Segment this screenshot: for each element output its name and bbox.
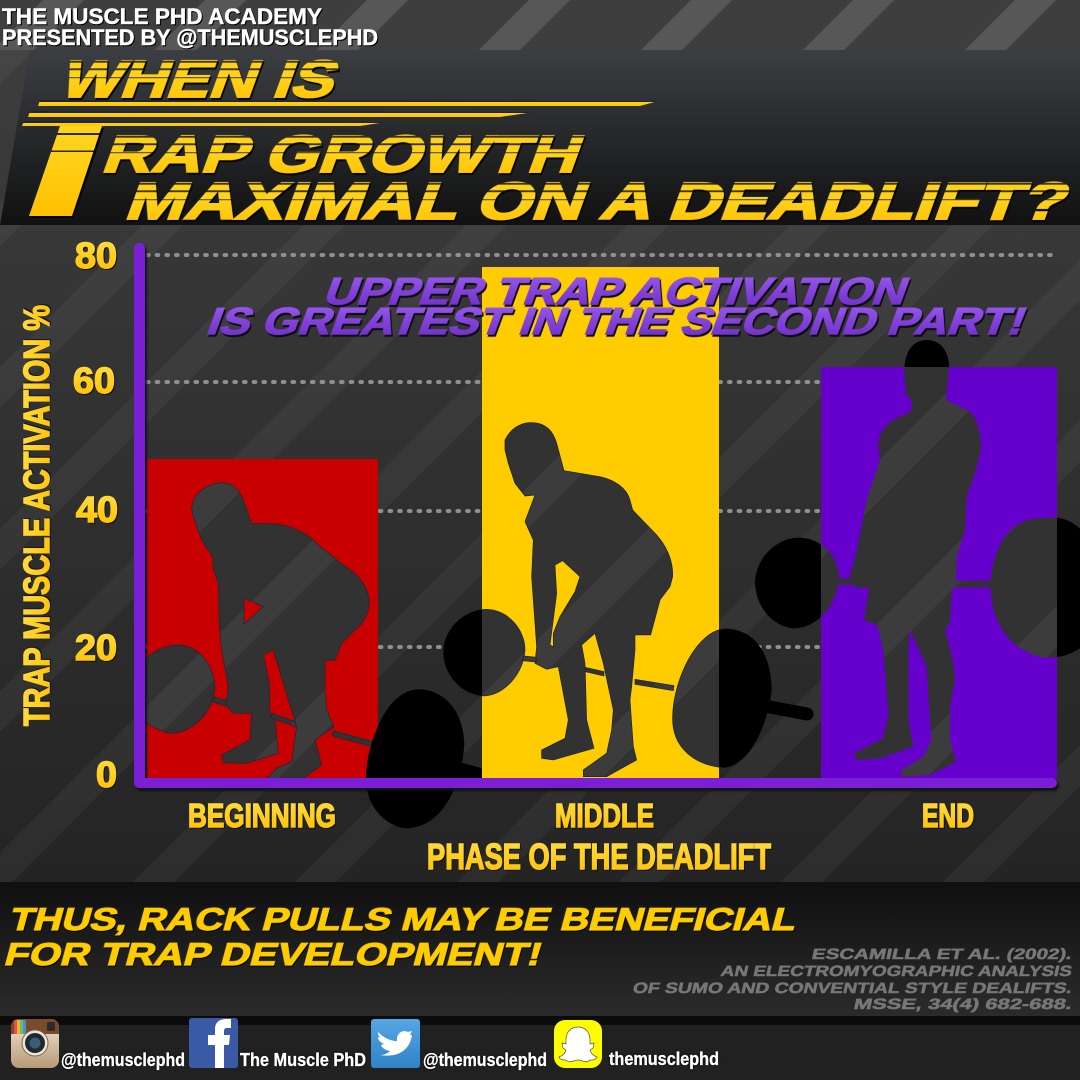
footer panel (0, 882, 1080, 1016)
bar: middle phase (482, 267, 719, 778)
callout: upper trap activation (202, 271, 1033, 343)
dotted gridlines (147, 255, 1056, 647)
title speed lines (22, 100, 658, 126)
icon: twitter (371, 1019, 420, 1068)
chart axes (134, 243, 1057, 788)
title: RAP GROWTH (96, 126, 592, 184)
title: WHEN IS (54, 51, 348, 109)
x axis title: PHASE OF THE DEADLIFT (427, 836, 771, 877)
icon: instagram (11, 1019, 59, 1068)
black plates of the barbells outside the bars (443, 340, 1080, 768)
x axis category labels: BEGINNING (188, 797, 336, 834)
x axis category labels: END (922, 797, 974, 834)
header band (0, 50, 1080, 225)
chart background (0, 50, 1080, 882)
takeaway text (1, 902, 802, 972)
plate: large black barbell plate of the first lifter (366, 689, 482, 828)
y axis tick labels: 20 (75, 627, 117, 668)
takeaway text: FOR TRAP DEVELOPMENT! (1, 937, 547, 972)
big letter T stem (29, 126, 102, 216)
academy credit: PRESENTED BY @THEMUSCLEPHD (2, 25, 378, 50)
top strip with diagonal stripes (0, 0, 1080, 50)
x axis category labels (188, 797, 974, 834)
citation: AN ELECTROMYOGRAPHIC ANALYSIS (719, 963, 1074, 980)
silhouette: lifter at the beginning of the pull (145, 483, 373, 778)
title (22, 51, 1079, 231)
x axis category labels: MIDDLE (555, 797, 654, 834)
title: MAXIMAL ON A DEADLIFT? (119, 173, 1079, 231)
callout: upper trap activation: UPPER TRAP ACTIVATION (319, 271, 915, 313)
y axis tick labels (73, 235, 118, 795)
label: instagram handle: @themusclephd (61, 1050, 185, 1070)
label: facebook name: The Muscle PhD (240, 1050, 366, 1070)
icon: snapchat (554, 1020, 602, 1068)
y axis title: TRAP MUSCLE ACTIVATION % (16, 305, 57, 726)
academy credit: THE MUSCLE PHD ACADEMY (2, 4, 322, 29)
y axis tick labels: 0 (96, 754, 117, 795)
silhouette: lifter at the end of the pull (821, 367, 1057, 777)
citation: MSSE, 34(4) 682-688. (852, 996, 1074, 1013)
y axis tick labels: 60 (73, 360, 115, 401)
citation (631, 946, 1074, 1013)
silhouette: lifter in the middle of the pull (482, 422, 719, 777)
takeaway text: THUS, RACK PULLS MAY BE BENEFICIAL (6, 902, 802, 937)
y axis tick labels: 80 (75, 235, 117, 276)
academy credit (2, 4, 378, 50)
bar: end phase (821, 367, 1057, 778)
social strip (0, 1016, 1080, 1080)
citation: ESCAMILLA ET AL. (2002). (810, 946, 1074, 963)
callout: upper trap activation: IS GREATEST IN THE SECOND PART! (202, 301, 1033, 343)
label: twitter handle: @themusclephd (423, 1050, 547, 1070)
label: snapchat handle: themusclephd (609, 1049, 719, 1069)
bar: beginning phase (147, 459, 378, 778)
y axis tick labels: 40 (76, 489, 118, 530)
citation: OF SUMO AND CONVENTIAL STYLE DEALIFTS. (631, 980, 1074, 997)
icon: facebook (189, 1018, 238, 1068)
